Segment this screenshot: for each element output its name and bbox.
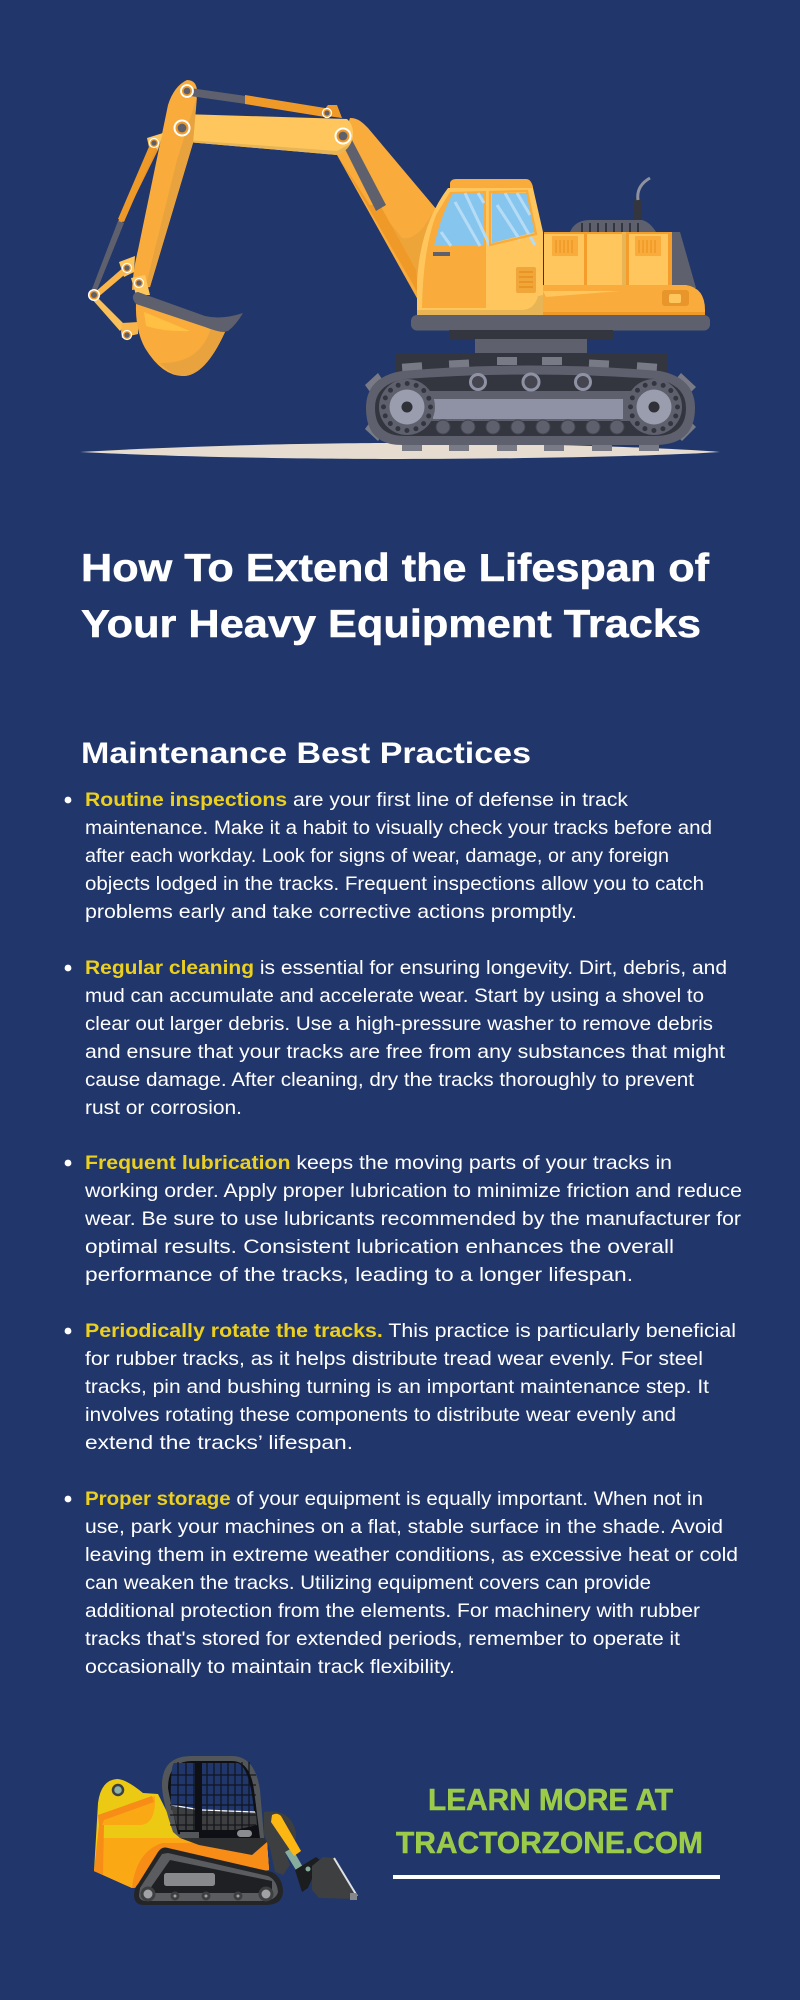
practice: proper storage: tracks that's stored for extended periods, remember to operate it — [85, 1628, 681, 1650]
practice: regular cleaning: Regular cleaning is essential for ensuring longevity. Dirt, debris, and — [85, 957, 727, 979]
practice: routine inspections: maintenance. Make it a habit to visually check your tracks before and — [85, 817, 712, 839]
loader cab — [162, 1756, 267, 1855]
practice: rotate the tracks: Periodically rotate the tracks. This practice is particularly beneficial — [85, 1320, 736, 1342]
practice: routine inspections: Routine inspections are your first line of defense in track — [85, 789, 628, 811]
practice: rotate the tracks: for rubber tracks, as it helps distribute tread wear evenly. For steel — [85, 1348, 703, 1370]
title — [81, 547, 710, 646]
underline — [393, 1875, 720, 1879]
practice: regular cleaning: mud can accumulate and accelerate wear. Start by using a shovel to — [85, 985, 704, 1007]
practice: routine inspections: problems early and take corrective actions promptly. — [85, 901, 577, 923]
call to action — [393, 1783, 720, 1879]
title: Your Heavy Equipment Tracks — [81, 603, 701, 646]
practice: frequent lubrication: working order. Apply proper lubrication to minimize friction and reduce — [84, 1180, 742, 1202]
practice: proper storage: additional protection from the elements. For machinery with rubber — [85, 1600, 701, 1622]
practice: regular cleaning — [65, 957, 727, 1119]
excavator boom — [170, 114, 437, 300]
excavator arm and bucket linkage — [91, 80, 342, 376]
practice: regular cleaning: clear out larger debris. Use a high-pressure washer to remove debris — [85, 1013, 713, 1035]
loader arm and bucket — [264, 1811, 357, 1900]
practice: rotate the tracks: tracks, pin and bushing turning is an important maintenance step. It — [85, 1376, 710, 1398]
practice: proper storage — [65, 1488, 738, 1678]
practice: frequent lubrication: wear. Be sure to use lubricants recommended by the manufacturer for — [84, 1208, 742, 1230]
heading: maintenance best practices: Maintenance Best Practices — [81, 737, 531, 770]
excavator track — [365, 357, 696, 451]
practice: rotate the tracks: extend the tracks’ lifespan. — [85, 1432, 353, 1454]
excavator cab — [417, 179, 543, 315]
practice: proper storage: occasionally to maintain track flexibility. — [85, 1656, 455, 1678]
excavator undercarriage — [395, 315, 710, 375]
practice: proper storage: leaving them in extreme weather conditions, as excessive heat or cold — [85, 1544, 738, 1566]
loader track — [134, 1848, 283, 1905]
illustration: skid steer loader — [94, 1756, 357, 1905]
practice: proper storage: can weaken the tracks. Utilizing equipment covers can provide — [85, 1572, 651, 1594]
call to action: LEARN MORE AT — [428, 1783, 673, 1817]
bullet list: maintenance practices — [65, 789, 742, 1678]
call to action: TRACTORZONE.COM — [396, 1826, 703, 1860]
title: How To Extend the Lifespan of — [81, 547, 710, 590]
illustration: excavator — [80, 80, 720, 459]
loader body — [94, 1779, 269, 1888]
practice: proper storage: use, park your machines on a flat, stable surface in the shade. Avoid — [85, 1516, 723, 1538]
practice: frequent lubrication — [65, 1152, 742, 1286]
ground shadow — [80, 443, 720, 459]
hydraulic pins — [89, 85, 350, 340]
bucket — [136, 302, 225, 376]
practice: routine inspections: after each workday. Look for signs of wear, damage, or any foreign — [85, 845, 669, 867]
practice: rotate the tracks — [65, 1320, 736, 1454]
practice: regular cleaning: and ensure that your tracks are free from any substances that might — [85, 1041, 726, 1063]
practice: regular cleaning: cause damage. After cleaning, dry the tracks thoroughly to prevent — [85, 1069, 695, 1091]
practice: frequent lubrication: Frequent lubrication keeps the moving parts of your tracks in — [85, 1152, 672, 1174]
practice: routine inspections: objects lodged in the tracks. Frequent inspections allow you to catch — [85, 873, 704, 895]
practice: regular cleaning: rust or corrosion. — [85, 1097, 242, 1119]
practice: proper storage: Proper storage of your equipment is equally important. When not in — [85, 1488, 703, 1510]
excavator engine housing — [543, 178, 705, 315]
practice: routine inspections — [65, 789, 712, 923]
practice: rotate the tracks: involves rotating these components to distribute wear evenly and — [85, 1404, 676, 1426]
practice: frequent lubrication: performance of the tracks, leading to a longer lifespan. — [85, 1264, 633, 1286]
practice: frequent lubrication: optimal results. Consistent lubrication enhances the overall — [85, 1236, 674, 1258]
